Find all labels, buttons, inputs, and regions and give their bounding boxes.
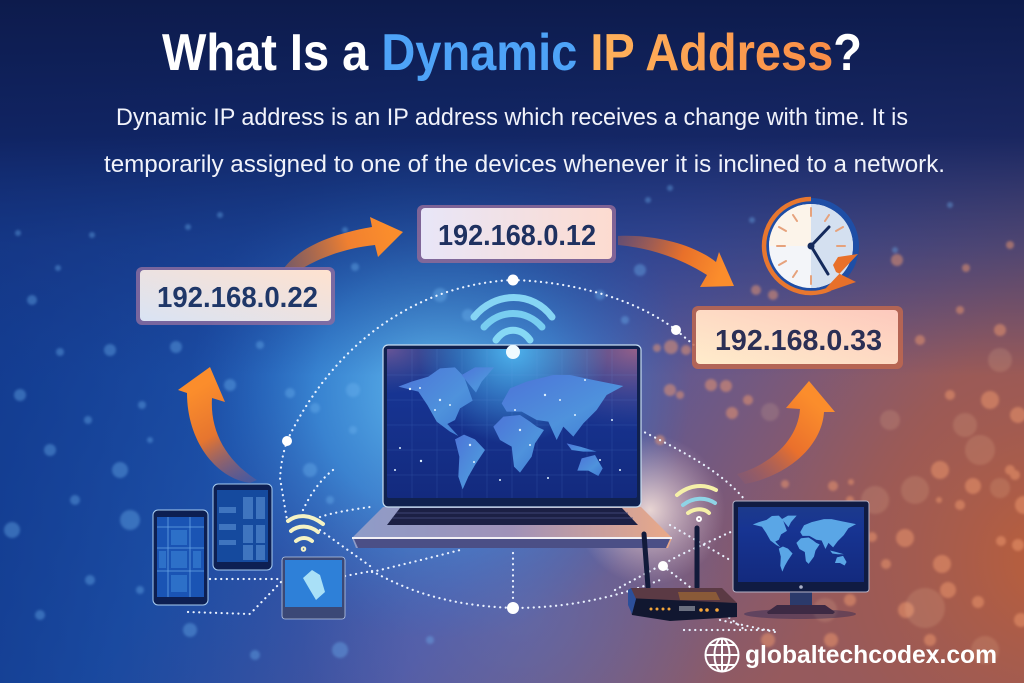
icon: globe	[706, 638, 738, 672]
icon: laptop wifi	[474, 298, 552, 340]
IP box: 192.168.0.12: 192.168.0.12	[438, 220, 596, 252]
IP box: 192.168.0.33: 192.168.0.33	[715, 325, 882, 357]
website name: globaltechcodex.com	[745, 641, 997, 669]
desktop monitor	[733, 501, 869, 619]
small tablet	[282, 557, 345, 619]
icon: device wifi	[288, 516, 323, 550]
icon: clock refresh arrow	[826, 254, 858, 291]
tablet: left	[153, 510, 208, 605]
arrow: monitor to 192.168.0.33	[737, 381, 835, 484]
IP box: 192.168.0.22: 192.168.0.22	[157, 282, 318, 314]
laptop base	[352, 507, 672, 548]
IP box: 192.168.0.22	[136, 267, 335, 325]
bokeh particles	[4, 185, 1024, 664]
arrow: devices to 192.168.0.22	[178, 367, 257, 483]
description text	[104, 104, 945, 178]
arrow: 192.168.0.22 to 192.168.0.12	[284, 217, 403, 268]
laptop glowing node	[506, 345, 520, 359]
description text: temporarily assigned to one of the devices whenever it is inclined to a network.	[104, 151, 945, 178]
IP box: 192.168.0.33	[692, 306, 903, 369]
laptop lid	[383, 345, 641, 507]
world map	[398, 367, 623, 489]
router	[628, 528, 737, 621]
IP box: 192.168.0.12	[417, 205, 616, 263]
network nodes	[282, 274, 681, 614]
laptop keyboard	[387, 508, 638, 525]
router antennas	[644, 534, 648, 587]
description text: Dynamic IP address is an IP address which receives a change with time. It is	[116, 104, 908, 131]
footer logo	[706, 638, 997, 672]
tablet: right	[213, 484, 272, 570]
laptop screen	[387, 349, 637, 498]
arrow: 192.168.0.12 to 192.168.0.33	[618, 236, 734, 287]
icon: clock	[763, 198, 859, 294]
dotted network connection lines	[188, 280, 775, 632]
icon: router wifi	[677, 486, 716, 520]
title: What Is a Dynamic IP Address?	[162, 24, 862, 82]
laptop	[352, 345, 672, 548]
router status lights	[650, 608, 719, 612]
